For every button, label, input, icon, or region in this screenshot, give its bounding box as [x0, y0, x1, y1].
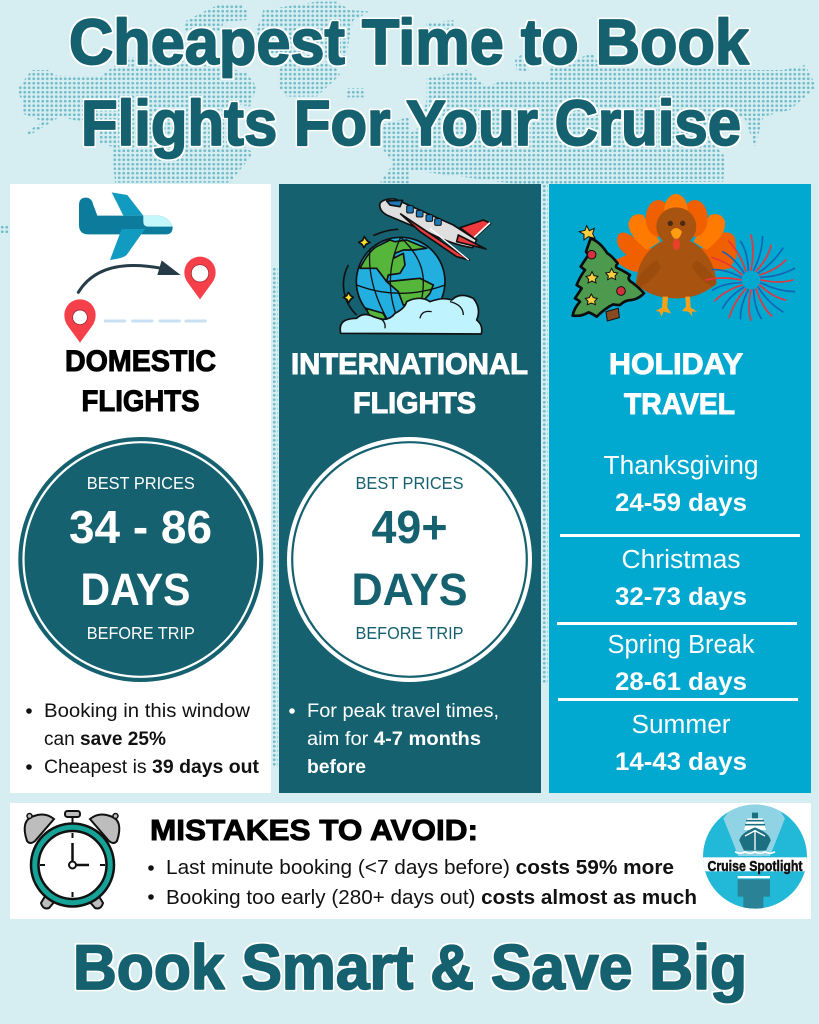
christmas [615, 546, 747, 611]
fireworks [706, 235, 795, 320]
badge: 49+ days: 49+ [372, 501, 448, 553]
heading: holiday travel [609, 348, 743, 421]
bullet list: international: aim for 4-7 months [307, 729, 481, 750]
thanksgiving: Thanksgiving [604, 452, 758, 480]
title: Flights For Your Cruise [81, 87, 741, 159]
christmas: Christmas [622, 546, 740, 574]
holiday windows list [557, 452, 800, 776]
heading: international flights: FLIGHTS [353, 387, 476, 420]
heading: international flights [291, 348, 528, 420]
bullet list: mistakes [148, 856, 697, 909]
bullet list: mistakes: Last minute booking (<7 days before) costs 59% more [166, 856, 674, 879]
heading: domestic flights: FLIGHTS [82, 385, 200, 418]
logo: cruise spotlight [700, 803, 810, 910]
icon: plane and route [64, 192, 216, 343]
heading: holiday travel: TRAVEL [624, 388, 735, 421]
bullet list: international: For peak travel times, [307, 701, 499, 722]
thanksgiving [604, 452, 758, 517]
panel: domestic flights [10, 184, 271, 793]
bullet list: domestic [26, 701, 260, 778]
panel: international flights [279, 184, 541, 793]
badge: 34 - 86 days: BEST PRICES [87, 473, 195, 493]
badge: 34 - 86 days: 34 - 86 [69, 501, 212, 553]
heading: holiday travel: HOLIDAY [609, 348, 743, 381]
bullet list: domestic: Booking in this window [44, 701, 250, 722]
bullet list: domestic: Cheapest is 39 days out [44, 757, 260, 778]
christmas tree [606, 308, 619, 321]
badge: 34 - 86 days: DAYS [80, 564, 190, 615]
badge: 49+ days: BEFORE TRIP [356, 623, 464, 643]
summer [615, 711, 747, 776]
badge: 34 - 86 days [18, 437, 263, 682]
heading: international flights: INTERNATIONAL [291, 348, 528, 381]
christmas: 32-73 days [615, 583, 747, 611]
title [69, 6, 749, 159]
heading: domestic flights: DOMESTIC [65, 345, 216, 378]
icon: alarm clock [25, 811, 119, 908]
title: Cheapest Time to Book [69, 6, 749, 78]
badge: 49+ days: DAYS [352, 564, 468, 615]
heading: domestic flights [65, 345, 216, 418]
panel: holiday travel [549, 184, 811, 793]
bullet list: international: before [307, 757, 366, 778]
badge: 49+ days [287, 437, 532, 682]
summer: Summer [632, 711, 731, 739]
spring break: Spring Break [608, 631, 755, 659]
icon: tree, turkey and fireworks [573, 194, 795, 321]
footer tagline: Book Smart & Save Big [73, 933, 747, 1003]
spring break [608, 631, 755, 696]
badge: 49+ days: BEST PRICES [356, 473, 464, 493]
turkey [615, 232, 653, 272]
heading: mistakes to avoid: MISTAKES TO AVOID: [150, 815, 478, 847]
bullet list: international [289, 701, 499, 778]
bullet list: domestic: can save 25% [44, 729, 166, 750]
icon: globe, plane and cloud [340, 199, 491, 334]
spring break: 28-61 days [615, 668, 747, 696]
dotted world map background [0, 2, 817, 767]
thanksgiving: 24-59 days [615, 489, 747, 517]
panel: mistakes to avoid [10, 803, 811, 919]
bullet list: mistakes: Booking too early (280+ days out) costs almost as much [166, 886, 697, 909]
badge: 34 - 86 days: BEFORE TRIP [87, 623, 195, 643]
summer: 14-43 days [615, 748, 747, 776]
